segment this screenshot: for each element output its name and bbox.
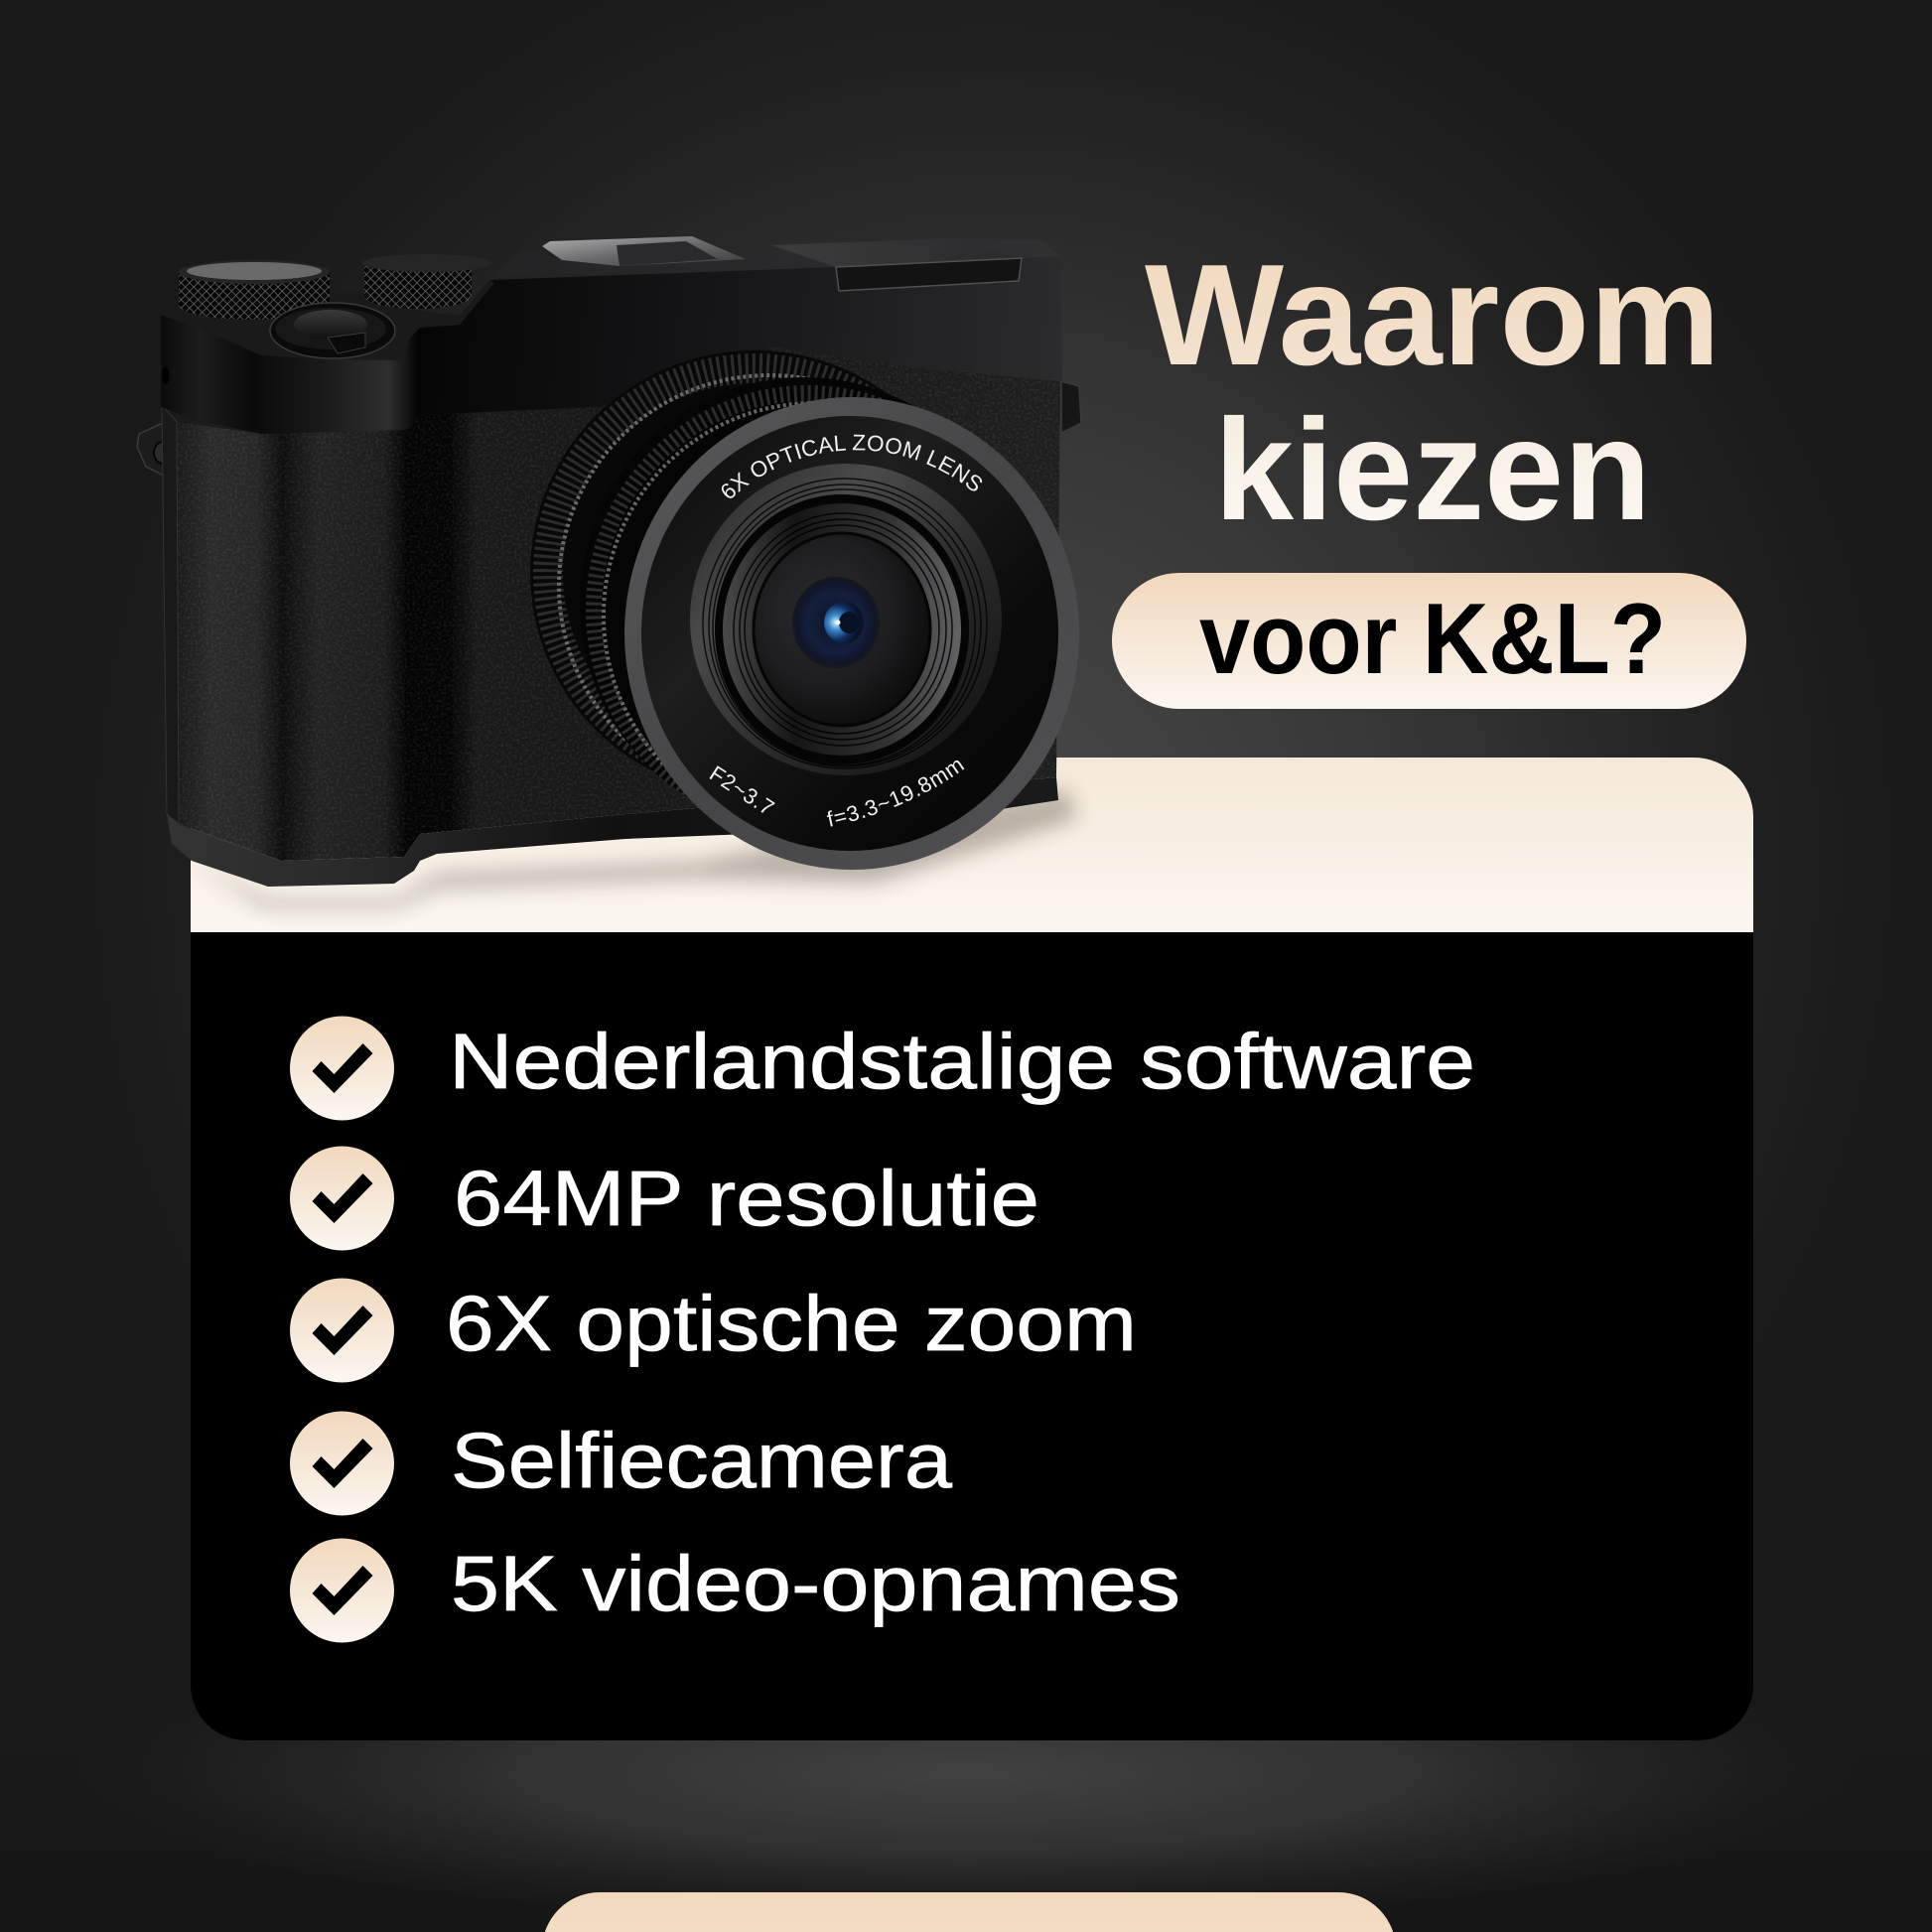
subtitle pill [1112, 573, 1746, 709]
item: 6X optische zoom [290, 1279, 1137, 1382]
glossy grip band [161, 315, 420, 434]
leather panel [177, 347, 1060, 861]
item: 64MP resolutie [290, 1146, 1039, 1251]
check icon [290, 1017, 394, 1120]
lens outer rim [624, 397, 1079, 870]
lens barrel [690, 464, 1002, 775]
base plate [167, 777, 1058, 887]
rear knurled ring [530, 350, 1029, 830]
speaker hole [163, 366, 169, 384]
bottom call-to-action button [542, 1892, 1396, 1932]
top plate [489, 238, 1060, 277]
flash housing [771, 238, 1022, 291]
glass element [754, 533, 930, 726]
card body [191, 932, 1753, 1740]
title line: Waarom: Waarom [1145, 234, 1721, 395]
check icon [290, 1412, 394, 1515]
item: Selfiecamera [290, 1412, 952, 1515]
lens [624, 397, 1079, 870]
pupil [824, 602, 864, 643]
camera photo illustration [136, 236, 1080, 887]
camera shadow [194, 789, 1077, 908]
hot shoe [542, 236, 746, 266]
mode dial [179, 260, 330, 320]
check icon [290, 1146, 394, 1251]
right strap lug [1061, 381, 1081, 433]
grip top face [161, 280, 494, 360]
item text: 64MP resolutie [454, 1154, 1039, 1242]
front upper panel [420, 256, 1062, 415]
check icon [290, 1539, 394, 1642]
item: 5K video-opnames [290, 1539, 1180, 1642]
side strip [162, 405, 179, 824]
panel: feature card [191, 758, 1753, 1740]
subtitle text: voor K&L? [1199, 584, 1666, 695]
item text: Selfiecamera [451, 1416, 952, 1504]
inner ring [715, 494, 969, 764]
card header band [191, 758, 1753, 932]
item text: 6X optische zoom [446, 1279, 1137, 1367]
lens face [641, 416, 1058, 851]
check icon [290, 1279, 394, 1382]
lens marking: aperture: F2~3.7 [705, 760, 778, 820]
item text: 5K video-opnames [451, 1539, 1180, 1627]
left strap lug [137, 419, 184, 482]
lens marking: zoom: 6X OPTICAL ZOOM LENS [721, 435, 983, 498]
lens marking: focal length: f=3.3~19.8mm [826, 760, 965, 827]
title line: kiezen: kiezen [1214, 389, 1651, 550]
control dial [362, 254, 491, 309]
barrel ribs [703, 479, 987, 768]
blue coating [792, 577, 880, 668]
item: Nederlandstalige software [290, 1017, 1475, 1120]
title [1145, 234, 1721, 550]
item text: Nederlandstalige software [449, 1017, 1475, 1105]
feature list [290, 1017, 1475, 1642]
shutter button [270, 303, 395, 358]
